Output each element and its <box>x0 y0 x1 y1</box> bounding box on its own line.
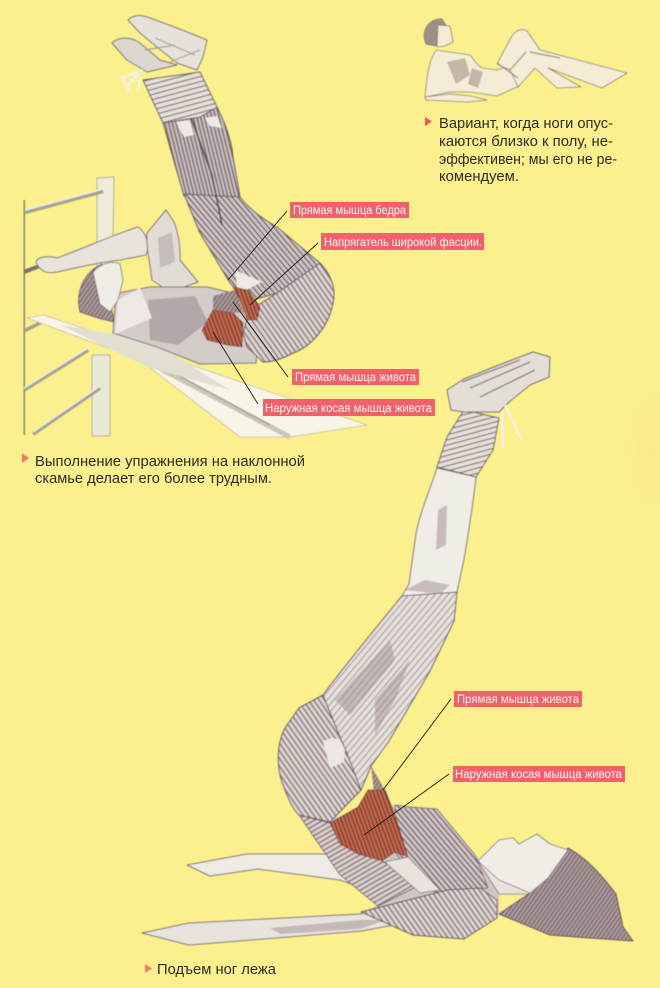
side and back muscles <box>395 805 488 895</box>
wall bars <box>24 177 114 436</box>
abdomen upper stripes <box>213 290 244 313</box>
arm shading <box>158 232 175 268</box>
label: external oblique, bench: Наружная косая мышца живота <box>265 403 433 415</box>
front arm on floor <box>142 906 410 945</box>
rear arm on floor <box>187 854 354 885</box>
caption: variant not recommended: комендуем. <box>439 169 519 185</box>
leader lines: incline bench labels <box>213 211 318 404</box>
caption: variant not recommended: Вариант, когда ноги опус- <box>439 116 613 132</box>
arm and hand <box>425 94 487 102</box>
highlights on shin and thigh <box>176 116 262 294</box>
lat band under torso <box>299 815 420 906</box>
legs <box>497 30 627 88</box>
caption: variant not recommended <box>425 116 617 185</box>
muscle: obliques, highlighted <box>330 790 408 861</box>
hip highlight <box>323 738 345 768</box>
glute and hip <box>278 695 361 822</box>
muscle: tensor fasciae latae, highlighted <box>233 287 260 320</box>
neck <box>478 861 540 894</box>
legs: thighs <box>184 194 320 302</box>
torso <box>113 287 258 364</box>
incline bench <box>27 315 367 437</box>
label: external oblique, lying: Наружная косая мышца живота <box>455 769 623 781</box>
label: rectus abdominis, bench: Прямая мышца живота <box>295 372 417 384</box>
face <box>478 834 568 893</box>
far arm <box>36 227 148 273</box>
serratus <box>385 857 440 893</box>
lower leg <box>402 468 476 596</box>
label: external oblique, bench <box>263 399 435 416</box>
legs: lower legs <box>163 107 240 212</box>
shoulder muscle <box>361 888 497 939</box>
head <box>79 262 152 334</box>
chest shading <box>148 296 208 345</box>
caption: incline bench: скамье делает его более трудным. <box>35 471 272 487</box>
near arm <box>147 210 198 292</box>
shoe <box>447 352 550 450</box>
torso base <box>306 805 499 939</box>
torso <box>425 50 519 97</box>
socks <box>143 72 217 123</box>
arm shading <box>270 920 385 934</box>
caption: lying leg raise: Подъем ног лежа <box>157 962 277 978</box>
band on legs <box>497 52 560 78</box>
face <box>437 25 453 47</box>
shoes <box>112 16 207 92</box>
small figure: variant with legs close to the floor <box>424 19 627 102</box>
caption: variant not recommended: каются близко к полу, не- <box>439 134 613 150</box>
glute and hip <box>243 263 334 362</box>
label: rectus femoris: Прямая мышца бедра <box>293 205 407 217</box>
caption: incline bench <box>22 453 305 487</box>
leader lines: lying leg raise labels <box>364 699 451 835</box>
caption: variant not recommended: эффективен; мы его не ре- <box>439 152 617 168</box>
hair <box>499 848 633 941</box>
hair <box>424 19 447 46</box>
caption: incline bench: Выполнение упражнения на наклонной <box>35 454 305 470</box>
label: rectus abdominis, lying: Прямая мышца живота <box>457 694 580 706</box>
thigh <box>323 592 457 790</box>
chest and waist shading <box>447 58 483 88</box>
muscle: obliques, highlighted <box>202 310 243 347</box>
sock <box>437 410 499 477</box>
lower leg shading <box>405 505 450 594</box>
label: tensor fasciae latae <box>321 233 484 250</box>
exercise illustration: lying leg raise <box>142 352 633 945</box>
gap between legs <box>190 115 222 225</box>
label: tensor fasciae latae: Напрягатель широкой фасции. <box>324 237 482 249</box>
rectus abdominis upper stripes <box>371 766 395 815</box>
exercise illustration: incline bench leg raise <box>24 16 367 437</box>
thigh shading <box>335 640 410 735</box>
